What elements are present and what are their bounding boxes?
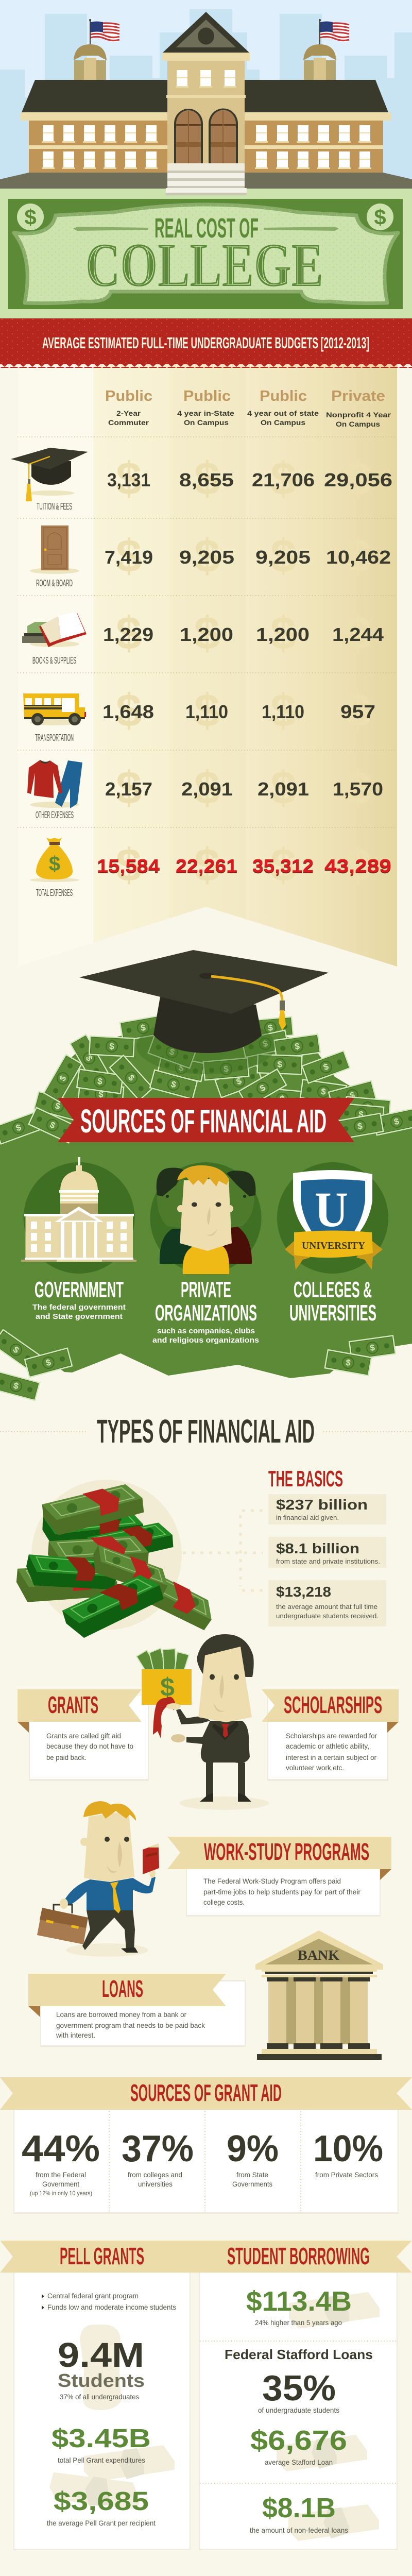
row: transportation: 1,110 (262, 701, 304, 722)
text: student borrowing facts: the amount of non-federal loans (250, 2526, 348, 2534)
panel: loans (28, 1974, 246, 2047)
dollar watermarks: $ (116, 608, 142, 659)
icon: university crest (277, 1162, 388, 1274)
dollar watermarks (116, 453, 371, 891)
right cupola (303, 44, 336, 81)
dollar watermarks: $ (194, 531, 220, 582)
illustration: pile of money: $ (357, 1121, 364, 1131)
icon: dollar medallion left (17, 204, 44, 230)
dollar watermarks: $ (345, 531, 371, 582)
text: government: and State government (36, 1312, 123, 1321)
illustration: scattered bills below panel: $ (369, 1343, 376, 1353)
left cupola (74, 44, 107, 81)
icon: books (22, 612, 87, 647)
title line 2: COLLEGE (85, 231, 323, 300)
table column headers: Public (183, 388, 231, 404)
dollar watermarks: $ (116, 762, 142, 814)
dollar watermarks: $ (345, 608, 371, 659)
stat: federal: Government (42, 2180, 79, 2188)
dollar watermarks: $ (116, 453, 142, 505)
illustration: pile of money: $ (57, 1074, 68, 1083)
row: books and supplies: 1,200 (256, 624, 310, 645)
text: government: The federal government (32, 1303, 126, 1312)
text: private organizations: such as companies, clubs (157, 1327, 255, 1335)
illustration: scattered bills below panel: $ (12, 1381, 20, 1392)
panel: scholarships: volunteer work,etc. (286, 1764, 344, 1772)
illustration: pile of money: $ (109, 1041, 115, 1052)
row: room and board: 7,419 (105, 547, 153, 568)
row: other expenses: 2,091 (258, 778, 309, 800)
stat: federal: (up 12% in only 10 years) (30, 2190, 92, 2197)
text: pell grant facts: Students (58, 2370, 145, 2391)
stat: state: 9% (227, 2128, 279, 2170)
panel: grants: because they do not have to (46, 1742, 133, 1750)
text: student borrowing facts: $113.4B (246, 2286, 352, 2317)
row: total expenses: 43,289 (324, 855, 391, 876)
panel: the basics: $13,218 (276, 1584, 331, 1600)
panel: loans: Loans are borrowed money from a bank or (56, 2010, 186, 2019)
dollar watermarks: $ (270, 531, 296, 582)
illustration: pile of money: $ (178, 1063, 185, 1073)
lawn (0, 189, 412, 318)
illustration: scattered bills below panel: $ (11, 1345, 21, 1355)
doors (174, 108, 238, 163)
panel: grants: be paid back. (46, 1753, 87, 1761)
row: total expenses: 15,584 (97, 855, 160, 876)
panel: grants (18, 1689, 149, 1781)
icon: university crest: UNIVERSITY (302, 1240, 366, 1251)
row: room and board: ROOM & BOARD (36, 578, 73, 588)
watermarks (47, 2292, 380, 2541)
table row dividers (18, 437, 397, 827)
stat: federal: 44% (22, 2128, 100, 2170)
title line 1: REAL COST OF (154, 213, 259, 244)
illustration: pile of money: $ (262, 1039, 269, 1049)
table column headers: Public (105, 388, 152, 404)
illustration: pile of money: $ (322, 1061, 330, 1073)
panel: loans: LOANS (102, 1975, 143, 2002)
illustration: scattered bills below panel (0, 1329, 396, 1401)
row: tuition and fees (11, 448, 392, 512)
ornament bars (73, 227, 339, 231)
row: books and supplies: 1,244 (332, 624, 384, 645)
text: student borrowing facts: 24% higher than 5 years ago (255, 2318, 342, 2327)
row: tuition and fees: 29,056 (324, 469, 392, 490)
table column headers: Nonprofit 4 Year (326, 411, 391, 419)
row: room and board: 10,462 (326, 547, 391, 568)
illustration: pile of money: $ (14, 1122, 23, 1133)
panel: pell grants and student borrowing cards (0, 2241, 412, 2550)
panel: the basics: the average amount that full time (276, 1603, 377, 1611)
illustration: pile of money: $ (277, 1059, 283, 1070)
illustration: pile of money: $ (235, 1076, 243, 1087)
row: total expenses: 35,312 (252, 855, 314, 876)
row: total expenses: 22,261 (176, 856, 237, 877)
dollar watermarks: $ (194, 685, 220, 737)
dollar watermarks: $ (270, 608, 296, 659)
panel: loans: with interest. (56, 2031, 95, 2039)
steps (167, 163, 245, 188)
illustration: pile of money: $ (140, 1023, 147, 1033)
text: student borrowing facts: 35% (262, 2368, 336, 2408)
table column headers: 4 year out of state (247, 409, 319, 417)
table column headers (105, 388, 391, 428)
text: pell grant facts: Funds low and moderate income students (47, 2303, 176, 2311)
text: pell grant facts (42, 2292, 176, 2527)
illustration: pile of money: $ (279, 1094, 285, 1104)
illustration: pile of money: $ (393, 1116, 400, 1127)
text: colleges and universities (289, 1277, 376, 1326)
row: total expenses: 35,312 (252, 856, 314, 877)
stat: colleges: from colleges and (128, 2171, 182, 2179)
panel: the basics (268, 1466, 386, 1626)
icon: government capitol (21, 1157, 136, 1274)
stat: colleges (122, 2128, 194, 2188)
panel: scholarships: interest in a certain subject or (286, 1753, 376, 1761)
panel: loans: government program that needs to be paid back (56, 2021, 205, 2029)
icon: university crest: U (315, 1182, 348, 1237)
table column headers: On Campus (261, 418, 305, 427)
dollar watermarks: $ (270, 685, 296, 737)
panel: the basics: in financial aid given. (276, 1514, 339, 1521)
table column headers: Commuter (108, 418, 149, 427)
stat: federal: from the Federal (36, 2171, 86, 2179)
illustration: pile of money: $ (320, 1087, 327, 1097)
row: total expenses: 43,289 (324, 856, 391, 877)
illustration: pile of money: $ (267, 1023, 273, 1033)
main roof (22, 80, 388, 112)
illustration: man holding money envelope (136, 1634, 269, 1810)
illustration: big graduation cap (79, 950, 329, 1053)
panel: sources of financial aid background (0, 1030, 412, 1378)
row: other expenses: OTHER EXPENSES (36, 810, 74, 820)
text: pell grant facts: 9.4M (58, 2336, 144, 2375)
row: room and board: 9,205 (179, 547, 234, 568)
stat: private: 10% (313, 2128, 383, 2170)
brick wings (21, 112, 391, 173)
central tower (162, 12, 250, 164)
illustration: man holding money envelope: $ (160, 1673, 175, 1702)
text: student borrowing facts: of undergraduate students (258, 2406, 339, 2414)
row: books and supplies: BOOKS & SUPPLIES (32, 655, 76, 666)
row: other expenses: 2,157 (105, 778, 152, 800)
text: student borrowing facts: Federal Stafford Loans (225, 2347, 373, 2362)
illustration: pile of money: $ (365, 1103, 371, 1113)
panel: work-study programs: The Federal Work-Study Program offers paid (203, 1877, 341, 1885)
illustration: college building (0, 12, 412, 189)
illustration: bank building (255, 1930, 383, 2060)
icon: clothes (27, 760, 82, 808)
row: transportation: 957 (340, 701, 375, 722)
text: government: GOVERNMENT (35, 1277, 124, 1302)
illustration: pile of money: $ (170, 1079, 178, 1090)
illustration: pile of money: $ (223, 1064, 229, 1074)
illustration: pile of money: $ (97, 1076, 104, 1087)
row: tuition and fees: 3,131 (107, 469, 150, 490)
illustration: scattered bills below panel: $ (345, 1358, 352, 1368)
row: transportation: 1,648 (102, 701, 154, 722)
text: pell grant facts: $3,685 (54, 2486, 149, 2516)
icon: dollar medallion right (367, 204, 393, 230)
row: books and supplies: 1,229 (103, 624, 153, 645)
row: total expenses (30, 838, 391, 898)
illustration: bank building: BANK (298, 1947, 339, 1963)
stat: state (227, 2128, 279, 2188)
dollar watermarks: $ (345, 840, 371, 891)
panel: sources of grant aid (0, 2077, 412, 2214)
panel: work-study programs (167, 1837, 391, 1917)
table column headers: Public (260, 388, 307, 404)
stat: federal (22, 2128, 100, 2197)
panel: work-study programs: college costs. (203, 1898, 245, 1906)
illustration: pile of money: $ (126, 1073, 137, 1083)
illustration: pile of money: $ (48, 1120, 57, 1131)
fan of bills (136, 1648, 189, 1677)
text: pell grant facts: the average Pell Grant per recipient (47, 2519, 156, 2527)
text: pell grant facts: $3.45B (52, 2424, 151, 2453)
panel: work-study programs: part-time jobs to help students pay for part of their (203, 1888, 360, 1896)
dollar watermarks: $ (270, 453, 296, 505)
row: room and board (30, 526, 391, 588)
dollar watermarks: $ (194, 762, 220, 814)
row: tuition and fees: 8,655 (179, 469, 234, 490)
panel: the basics: $237 billion (276, 1497, 368, 1513)
chart: budget table columns (93, 364, 397, 967)
dollar watermarks: $ (270, 762, 296, 814)
illustration: pile of money: $ (168, 1046, 176, 1058)
text: student borrowing facts: average Stafford Loan (265, 2458, 333, 2466)
text: student borrowing facts: $8.1B (262, 2493, 336, 2523)
dollar watermarks: $ (116, 840, 142, 891)
illustration: pile of money (0, 1014, 412, 1145)
icon: school bus (23, 693, 86, 725)
text: student borrowing facts: $6,676 (250, 2425, 347, 2456)
illustration: scattered bills below panel: $ (45, 1357, 53, 1368)
stat: colleges: 37% (122, 2128, 194, 2170)
illustration: stacks of cash (15, 1480, 219, 1641)
panel: grants: Grants are called gift aid (46, 1732, 121, 1740)
panel: red header band (0, 318, 412, 368)
icon: door (30, 526, 79, 574)
text: government (32, 1277, 126, 1321)
illustration: student with book and briefcase (37, 1801, 159, 1957)
panel: the basics: THE BASICS (268, 1466, 343, 1492)
text: private organizations: ORGANIZATIONS (155, 1300, 257, 1326)
row: total expenses: TOTAL EXPENSES (36, 888, 73, 898)
panel: the basics: $8.1 billion (276, 1540, 359, 1556)
row: total expenses: 22,261 (176, 855, 237, 876)
panel: grants: GRANTS (48, 1691, 98, 1718)
icon: dollar medallion right: $ (374, 205, 386, 229)
heading: sources of financial aid ribbon (58, 1098, 354, 1142)
dollar watermarks: $ (345, 453, 371, 505)
front steps over lawn (166, 188, 247, 195)
panel: the basics: from state and private institutions. (276, 1557, 380, 1565)
row: transportation: 1,110 (185, 701, 228, 722)
dollar watermarks: $ (270, 840, 296, 891)
table column headers: Private (331, 388, 385, 404)
row: tuition and fees: 21,706 (252, 469, 315, 490)
connector: dotted (183, 1511, 263, 1590)
text: private organizations: and religious organizations (152, 1336, 259, 1345)
dollar watermarks: $ (345, 762, 371, 814)
panel: dollar bill title (8, 199, 403, 309)
row: total expenses: 15,584 (97, 856, 160, 877)
illustration: pile of money: $ (294, 1041, 301, 1052)
icon: graduation cap (11, 448, 88, 501)
panel: scholarships: Scholarships are rewarded for (286, 1732, 377, 1740)
panel: the basics: undergraduate students received. (276, 1612, 379, 1620)
row: other expenses (27, 760, 383, 820)
dollar watermarks: $ (194, 840, 220, 891)
table column headers: 2-Year (116, 409, 141, 417)
stat: state: Governments (232, 2180, 272, 2188)
dollar watermarks: $ (194, 608, 220, 659)
illustration: pile of money: $ (358, 1109, 364, 1120)
icon: money bag (30, 838, 79, 882)
stat: private: from Private Sectors (315, 2171, 378, 2179)
panel: pell grants and student borrowing cards: PELL GRANTS (60, 2243, 144, 2269)
text: pell grant facts: total Pell Grant expenditures (58, 2456, 145, 2464)
text: pell grant facts: Central federal grant program (47, 2292, 139, 2300)
dollar watermarks: $ (116, 685, 142, 737)
icon: left flag (89, 19, 119, 45)
table column headers: On Campus (184, 418, 229, 427)
row: books and supplies: 1,200 (180, 624, 233, 645)
panel: scholarships (262, 1689, 399, 1781)
table column headers: 4 year in-State (177, 409, 234, 417)
row: tuition and fees: TUITION & FEES (37, 501, 72, 512)
row: transportation (23, 693, 375, 743)
row: transportation: TRANSPORTATION (35, 733, 74, 743)
dollar watermarks: $ (116, 531, 142, 582)
text: private organizations: PRIVATE (181, 1277, 231, 1302)
illustration: pile of money: $ (54, 1101, 62, 1112)
illustration: pile of money: $ (349, 1090, 356, 1100)
row: books and supplies (22, 612, 384, 666)
ground path (0, 173, 412, 189)
illustration: pile of money: $ (83, 1054, 95, 1063)
panel: scholarships: academic or athletic ability, (286, 1742, 369, 1750)
stat: colleges: universities (138, 2180, 173, 2188)
illustration: pile of money: $ (258, 1082, 267, 1094)
icon: money bag: $ (49, 853, 60, 875)
icon: private organization people (150, 1162, 262, 1274)
icon: right flag (319, 19, 349, 45)
row: other expenses: 1,570 (333, 778, 383, 800)
dollar watermarks: $ (345, 685, 371, 737)
row: other expenses: 2,091 (181, 778, 233, 800)
icon: dollar medallion left: $ (24, 205, 37, 229)
dollar watermarks: $ (194, 453, 220, 505)
text: private organizations (152, 1277, 259, 1345)
row: room and board: 9,205 (255, 547, 311, 568)
stat: state: from State (236, 2171, 268, 2179)
text: pell grant facts: 37% of all undergraduates (60, 2393, 139, 2401)
text: student borrowing facts (200, 2286, 397, 2534)
panel: sky with city skyline (0, 0, 412, 191)
table column headers: On Campus (336, 420, 380, 428)
illustration: pile of money: $ (98, 1089, 104, 1099)
